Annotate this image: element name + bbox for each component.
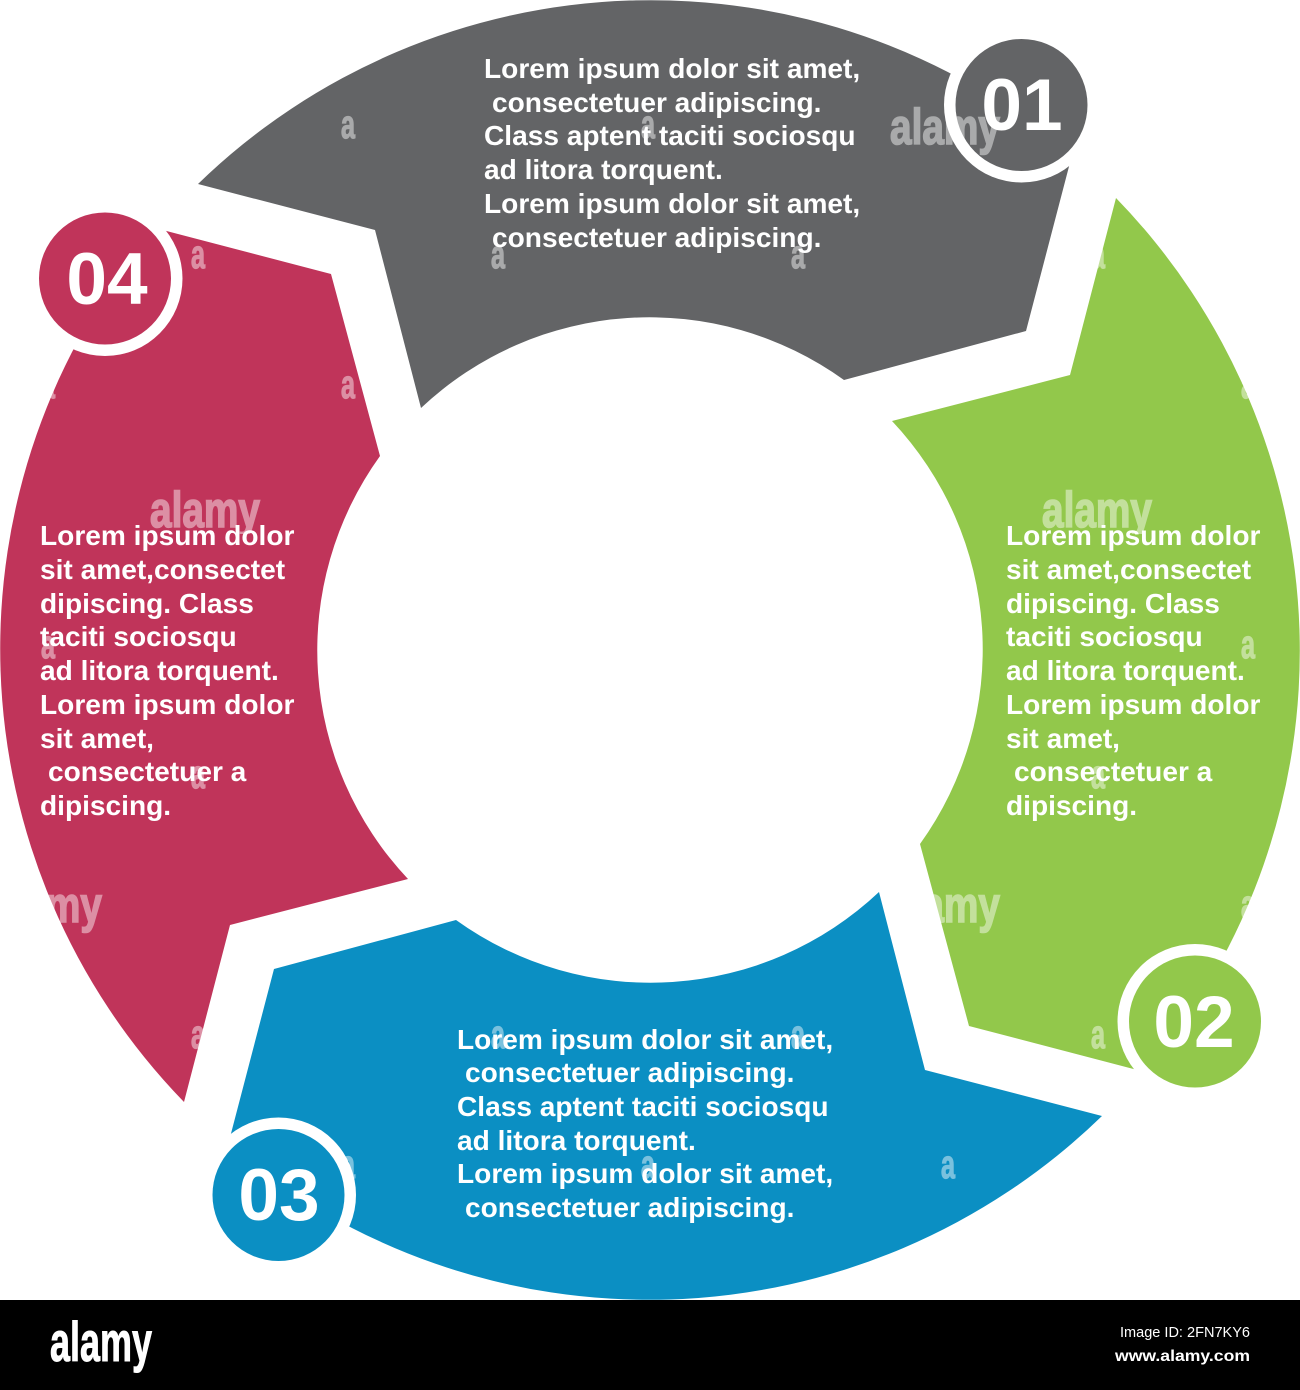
watermark overlay: alamy (1042, 482, 1152, 538)
website: www.alamy.com (1114, 1348, 1250, 1365)
watermark overlay: a (341, 363, 355, 407)
segment 03: blue arrow (228, 892, 1102, 1300)
text block: segment 04: dipiscing. Class (40, 588, 254, 619)
watermark overlay: a (1241, 623, 1255, 667)
text block: segment 04: dipiscing. (40, 790, 171, 821)
watermark overlay: a (341, 1143, 355, 1187)
text block: segment 04: ad litora torquent. (40, 655, 279, 686)
text block: segment 02: dipiscing. (1006, 790, 1137, 821)
text block: segment 01: Class aptent taciti sociosqu (484, 120, 856, 151)
watermark overlay: a (191, 1013, 205, 1057)
watermark overlay: a (1091, 1013, 1105, 1057)
watermark overlay: a (341, 103, 355, 147)
watermark overlay (0, 99, 1255, 1187)
badge 01 (944, 28, 1099, 182)
text block: segment 01: consectetuer adipiscing. (492, 222, 821, 253)
watermark overlay: a (41, 623, 55, 667)
text block: segment 02: sit amet,consectet (1006, 554, 1252, 585)
text block: segment 04: sit amet,consectet (40, 554, 286, 585)
text block: segment 04: consectetuer a (48, 756, 247, 787)
watermark overlay: a (491, 1013, 505, 1057)
footer logo: alamy (50, 1310, 152, 1373)
text block: segment 02: dipiscing. Class (1006, 588, 1220, 619)
text block: segment 01: Lorem ipsum dolor sit amet, (484, 53, 860, 84)
text block: segment 03: Lorem ipsum dolor sit amet, (457, 1024, 833, 1055)
text block: segment 04: taciti sociosqu (40, 621, 237, 652)
badge 02: 02 (1153, 982, 1235, 1063)
image id: Image ID: 2FN7KY6 (1120, 1324, 1250, 1341)
watermark overlay: a (491, 233, 505, 277)
watermark overlay: a (1241, 363, 1255, 407)
text block: segment 03: Lorem ipsum dolor sit amet, (457, 1158, 833, 1189)
segment 01: gray arrow (198, 0, 1072, 408)
watermark overlay: a (941, 1143, 955, 1187)
text block: segment 04: sit amet, (40, 723, 154, 754)
text block: segment 02: consectetuer a (1014, 756, 1213, 787)
watermark overlay: a (641, 1143, 655, 1187)
text block: segment 02: sit amet, (1006, 723, 1120, 754)
text block: segment 04: Lorem ipsum dolor (40, 689, 294, 720)
watermark overlay: alamy (890, 877, 1000, 933)
text block: segment 01: Lorem ipsum dolor sit amet, (484, 188, 860, 219)
watermark overlay: a (1091, 753, 1105, 797)
badge 04 (28, 201, 182, 356)
watermark overlay: a (791, 1013, 805, 1057)
text block: segment 02: ad litora torquent. (1006, 655, 1245, 686)
segment 04: crimson arrow (0, 228, 408, 1102)
text block: segment 03: ad litora torquent. (457, 1125, 696, 1156)
badge 03: 03 (238, 1155, 320, 1236)
watermark overlay: a (41, 363, 55, 407)
segment 02: green arrow (892, 198, 1300, 1072)
badge 02 (1118, 944, 1272, 1099)
watermark overlay: a (791, 233, 805, 277)
footer bar (0, 1300, 1300, 1390)
watermark overlay: a (641, 103, 655, 147)
text block: segment 03: consectetuer adipiscing. (465, 1192, 794, 1223)
text block: segment 04: Lorem ipsum dolor (40, 520, 294, 551)
text block: segment 01: ad litora torquent. (484, 154, 723, 185)
watermark overlay: alamy (150, 482, 260, 538)
badge 03 (201, 1118, 356, 1272)
text block: segment 02: Lorem ipsum dolor (1006, 689, 1260, 720)
text block: segment 03: consectetuer adipiscing. (465, 1057, 794, 1088)
text block: segment 01: consectetuer adipiscing. (492, 87, 821, 118)
watermark overlay: a (1091, 233, 1105, 277)
watermark overlay: a (191, 753, 205, 797)
badge 01: 01 (981, 65, 1063, 146)
text block: segment 02: taciti sociosqu (1006, 621, 1203, 652)
watermark overlay: alamy (890, 99, 1000, 155)
watermark overlay: a (191, 233, 205, 277)
watermark overlay: a (1241, 883, 1255, 927)
badge 04: 04 (66, 239, 148, 320)
text block: segment 02: Lorem ipsum dolor (1006, 520, 1260, 551)
text block: segment 03: Class aptent taciti sociosqu (457, 1091, 829, 1122)
